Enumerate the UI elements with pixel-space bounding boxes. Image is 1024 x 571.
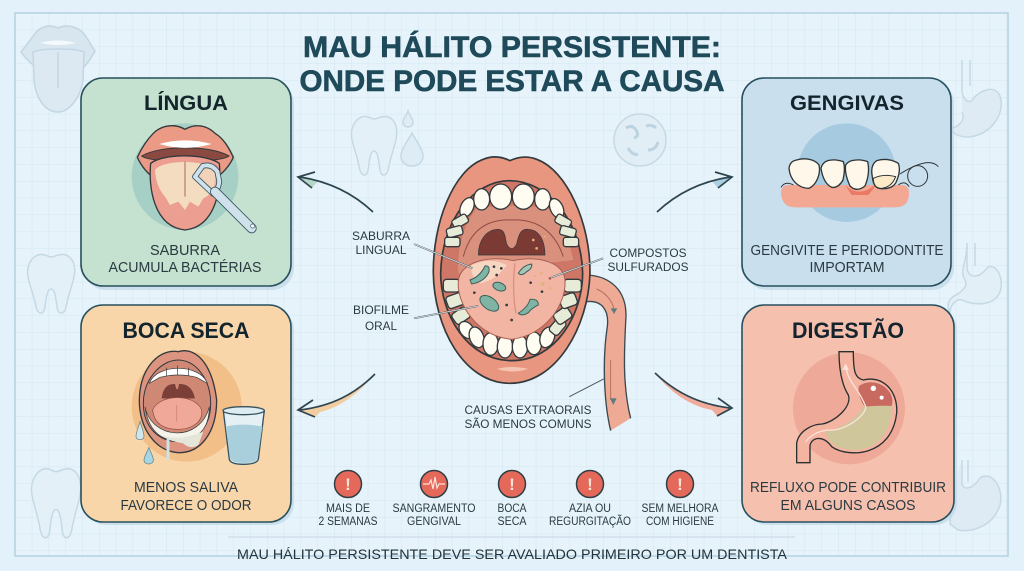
label: causas extraorais: SÃO MENOS COMUNS [464,417,592,431]
text: boca seca caption [120,480,252,514]
icon: dry mouth with water glass [132,351,264,464]
panel: digestão [742,305,957,525]
icon: faint bacteria circle [614,114,666,166]
label: saburra lingual: SABURRA [352,229,410,243]
warning: sangramento gengival [392,470,476,528]
text: boca seca caption: FAVORECE O ODOR [120,498,252,514]
label: saburra lingual [352,229,410,257]
label: causas extraorais [464,403,592,431]
warning: sem melhora com higiene [642,470,719,528]
arrow: to digestão [655,373,732,416]
text: língua caption [108,243,262,276]
warning: sem melhora com higiene: ! [677,475,683,494]
warning: mais de 2 semanas: 2 SEMANAS [318,516,378,528]
text: gengivas caption [750,243,944,276]
icon: tongue with scraper [132,123,255,230]
footer note: MAU HÁLITO PERSISTENTE DEVE SER AVALIADO PRIMEIRO POR UM DENTISTA [237,546,788,562]
text: digestão caption: EM ALGUNS CASOS [780,498,916,514]
outer lips [433,157,590,383]
warning: mais de 2 semanas: ! [345,475,351,494]
heading: língua: LÍNGUA [144,92,228,115]
icon: faint stomach middle right [948,243,1001,312]
warning: boca seca [498,470,527,528]
label: compostos sulfurados [608,246,688,274]
lower teeth [443,279,581,358]
text: língua caption: ACUMULA BACTÉRIAS [108,259,262,276]
icon: faint stomach top right [950,60,1001,137]
panel: língua [81,78,294,290]
warning: mais de 2 semanas: MAIS DE [326,503,370,515]
arrow: to gengivas [657,172,732,212]
icon: faint tongue background [21,26,95,112]
icon: faint water drops [401,111,423,166]
title: ONDE PODE ESTAR A CAUSA [300,65,724,98]
heading: digestão: DIGESTÃO [792,318,904,343]
label: causas extraorais: CAUSAS EXTRAORAIS [464,403,592,417]
panel: gengivas [742,78,954,290]
warning: boca seca: BOCA [498,503,527,515]
title [300,30,724,98]
label: biofilme oral: ORAL [365,319,397,333]
warning: boca seca: ! [509,475,515,494]
label: biofilme oral: BIOFILME [353,303,409,317]
tongue with bacteria [458,236,565,339]
warning: sem melhora com higiene: SEM MELHORA [642,503,719,515]
callout lines [414,244,605,397]
text: gengivas caption: IMPORTAM [810,260,884,276]
label: compostos sulfurados: COMPOSTOS [610,246,686,260]
panel: boca seca [81,305,294,525]
icon: faint stomach bottom right [950,460,1001,531]
arrow: to boca seca [298,374,375,417]
heading: gengivas: GENGIVAS [790,92,904,115]
text: digestão caption: REFLUXO PODE CONTRIBUIR [750,480,946,496]
icon: teeth and gums with floss [781,123,938,222]
heading: boca seca: BOCA SECA [122,318,250,343]
warning: azia ou regurgitação: AZIA OU [569,503,611,515]
title: MAU HÁLITO PERSISTENTE: [303,30,721,64]
upper teeth [445,184,579,247]
warning: azia ou regurgitação: ! [587,475,593,494]
icon: faint tooth left [27,254,75,313]
label: compostos sulfurados: SULFURADOS [608,260,688,274]
label: saburra lingual: LINGUAL [356,243,407,257]
arrow: to língua [298,172,373,212]
warning: boca seca: SECA [498,516,527,528]
icon: faint tooth bottom left [32,469,81,538]
palate and throat [458,206,573,273]
icon: faint tooth top center [351,116,397,175]
warning: azia ou regurgitação: REGURGITAÇÃO [549,515,631,528]
text: boca seca caption: MENOS SALIVA [134,480,238,496]
illustration: open mouth with esophagus [414,157,631,431]
warning: mais de 2 semanas [318,470,378,528]
text: digestão caption [750,480,946,514]
icon: stomach with reflux [793,352,905,464]
warning: sem melhora com higiene: COM HIGIENE [646,516,714,528]
warning: azia ou regurgitação [549,470,631,528]
text: gengivas caption: GENGIVITE E PERIODONTITE [750,243,944,259]
warning: sangramento gengival: SANGRAMENTO [392,503,476,515]
label: biofilme oral [353,303,409,333]
text: língua caption: SABURRA [150,243,220,259]
esophagus tube [587,275,631,431]
warning: sangramento gengival: GENGIVAL [407,516,462,528]
